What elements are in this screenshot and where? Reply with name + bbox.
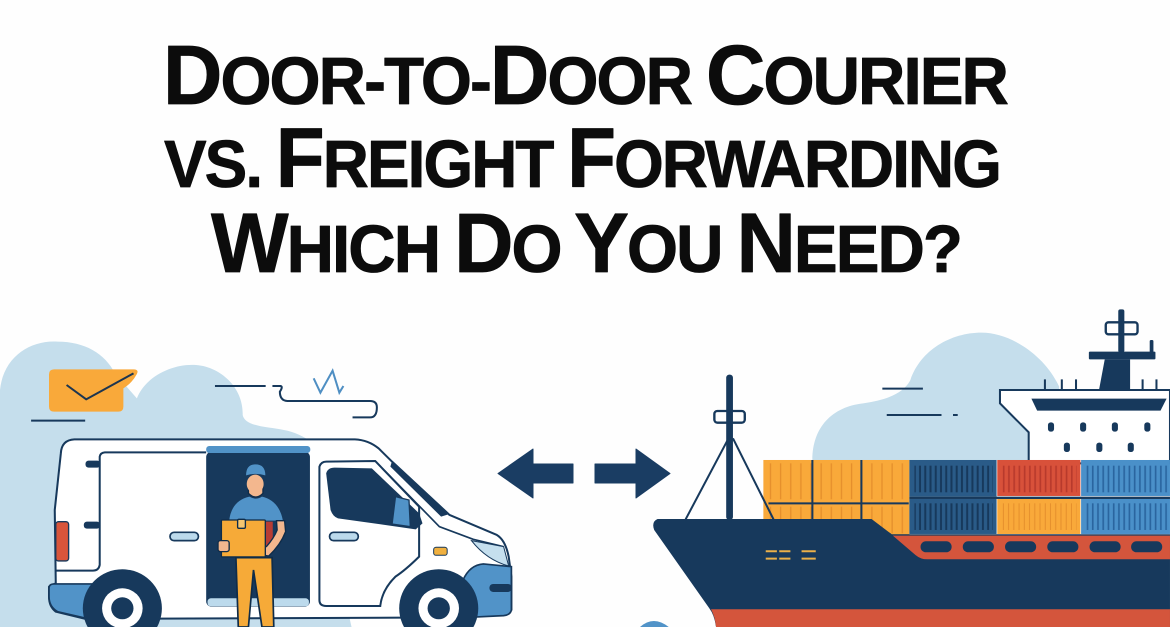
front bumper xyxy=(463,564,511,617)
water wave xyxy=(640,621,669,627)
van wheels xyxy=(83,569,478,627)
title: VS. FREIGHT FORWARDING xyxy=(164,111,1000,205)
indicator light xyxy=(434,547,447,555)
speed lines xyxy=(882,389,958,415)
tail light xyxy=(56,522,69,561)
bridge windows xyxy=(1048,422,1150,452)
cap xyxy=(246,464,265,475)
front door xyxy=(319,461,419,606)
parcel box xyxy=(221,520,265,557)
van window xyxy=(326,468,422,529)
neck and face xyxy=(248,487,263,497)
side mirror xyxy=(392,497,410,527)
icon: envelope xyxy=(49,369,138,412)
legs xyxy=(236,558,274,627)
shirt xyxy=(229,497,283,521)
rear bumper xyxy=(49,584,98,619)
illustration: container ship xyxy=(640,309,1170,627)
hand xyxy=(218,541,229,552)
railing xyxy=(1045,379,1156,390)
windshield strip xyxy=(390,461,450,517)
title: WHICH DO YOU NEED? xyxy=(211,196,961,290)
ship hull xyxy=(653,519,1170,627)
arrow: right xyxy=(595,449,670,498)
background cloud behind ship xyxy=(812,333,1059,460)
deck band xyxy=(1031,399,1167,411)
van body xyxy=(49,439,512,619)
rear latches xyxy=(86,461,100,468)
courier person holding box xyxy=(218,464,286,627)
bow mast xyxy=(686,375,774,520)
rear door lines xyxy=(56,452,206,571)
door handles xyxy=(170,532,198,541)
title xyxy=(163,28,1009,290)
background cloud behind van xyxy=(0,342,352,627)
hull markings xyxy=(766,551,816,559)
ship bridge superstructure xyxy=(1000,309,1170,463)
funnel and radar mast xyxy=(1099,359,1130,390)
red strap xyxy=(265,522,273,547)
cargo containers xyxy=(763,460,1170,535)
illustration: courier van xyxy=(0,342,512,627)
speed lines xyxy=(31,371,377,421)
cargo doorway xyxy=(206,446,310,607)
waterline band xyxy=(711,609,1170,627)
arm xyxy=(257,521,286,556)
red band with portholes xyxy=(893,536,1170,559)
arrow: left xyxy=(498,449,573,498)
title: DOOR-TO-DOOR COURIER xyxy=(163,28,1009,122)
headlight xyxy=(472,541,509,566)
